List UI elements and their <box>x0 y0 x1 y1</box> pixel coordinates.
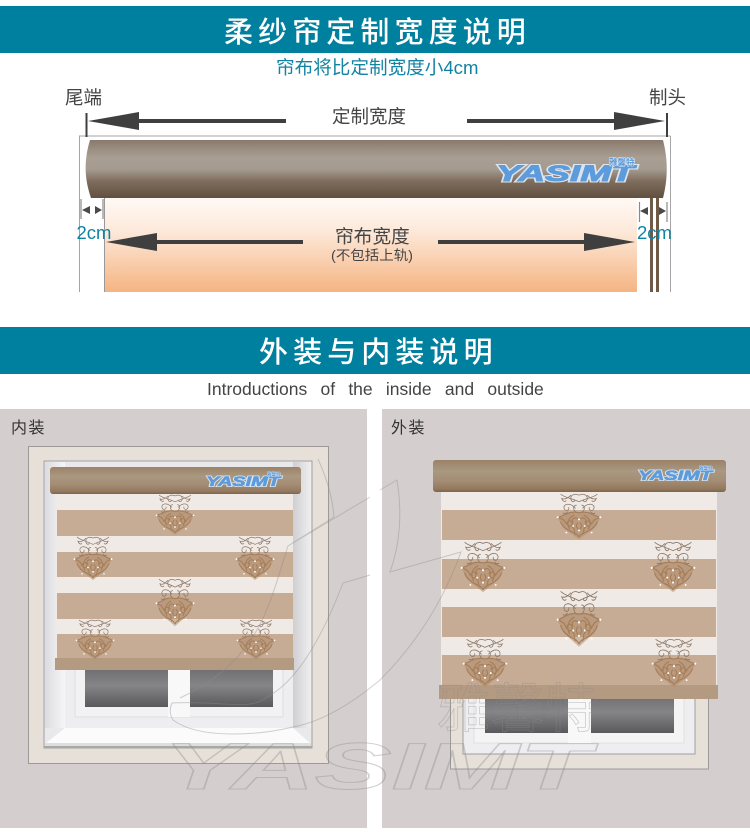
headrail logo: 雅馨特 <box>609 157 635 167</box>
curtain fabric area <box>105 198 637 292</box>
watermark: brand chinese name: 雅馨特 <box>437 680 599 739</box>
headrail <box>433 460 726 492</box>
english subtitle: Introductions of the inside and outside <box>207 379 544 399</box>
window frame <box>450 690 708 769</box>
lace ornaments <box>461 494 696 687</box>
banner: inside and outside title <box>0 327 750 374</box>
lace ornaments <box>74 495 275 660</box>
watermark <box>163 459 599 803</box>
left 2cm dimension <box>76 199 111 243</box>
custom width left arrow <box>86 112 286 137</box>
custom width right arrow <box>467 112 668 137</box>
label: head end: 制头 <box>649 87 686 108</box>
headrail <box>86 140 667 198</box>
window glass <box>85 668 273 707</box>
label: excluding top rail: (不包括上轨) <box>331 248 413 263</box>
headrail logo: 雅馨特 <box>267 471 281 478</box>
headrail logo: YASIMT <box>206 474 283 489</box>
left 2cm dimension: 2cm <box>76 222 111 243</box>
window glass <box>485 695 674 733</box>
watermark: leaf emblem <box>170 459 461 734</box>
right 2cm dimension: 2cm <box>637 222 672 243</box>
headrail logo: YASIMT <box>638 468 715 483</box>
window frame <box>28 446 328 764</box>
watermark: brand latin name: YASIMT <box>163 729 598 803</box>
panel: outside mount <box>382 409 750 828</box>
zebra shade <box>55 494 294 670</box>
fabric width left arrow <box>106 233 303 251</box>
banner: custom width title <box>0 6 750 53</box>
banner: custom width title: 柔纱帘定制宽度说明 <box>224 16 531 49</box>
pull cords <box>650 198 659 292</box>
headrail <box>50 467 301 494</box>
fabric width right arrow <box>438 233 635 251</box>
label: outside mount: 外装 <box>391 419 426 437</box>
banner: inside and outside title: 外装与内装说明 <box>259 336 498 369</box>
panel: inside mount <box>0 409 367 828</box>
headrail logo: YASIMT <box>496 161 637 186</box>
headrail logo: 雅馨特 <box>699 465 713 472</box>
headrail logo <box>638 465 715 483</box>
headrail logo: YASIMT <box>206 474 283 489</box>
subtitle: curtain 4cm narrower: 帘布将比定制宽度小4cm <box>276 57 478 78</box>
label: custom width: 定制宽度 <box>332 106 406 127</box>
fabric edges <box>104 198 106 292</box>
diagram frame lines <box>79 136 670 292</box>
width diagram <box>65 87 686 292</box>
zebra shade <box>439 491 718 699</box>
right 2cm dimension <box>637 202 672 243</box>
label: fabric width: 帘布宽度 <box>335 226 410 247</box>
label: tail end: 尾端 <box>65 87 102 108</box>
label: inside mount: 内装 <box>11 419 46 437</box>
headrail logo <box>496 157 637 186</box>
headrail logo: YASIMT <box>638 468 715 483</box>
headrail logo: YASIMT <box>496 161 637 186</box>
headrail logo <box>206 471 283 489</box>
